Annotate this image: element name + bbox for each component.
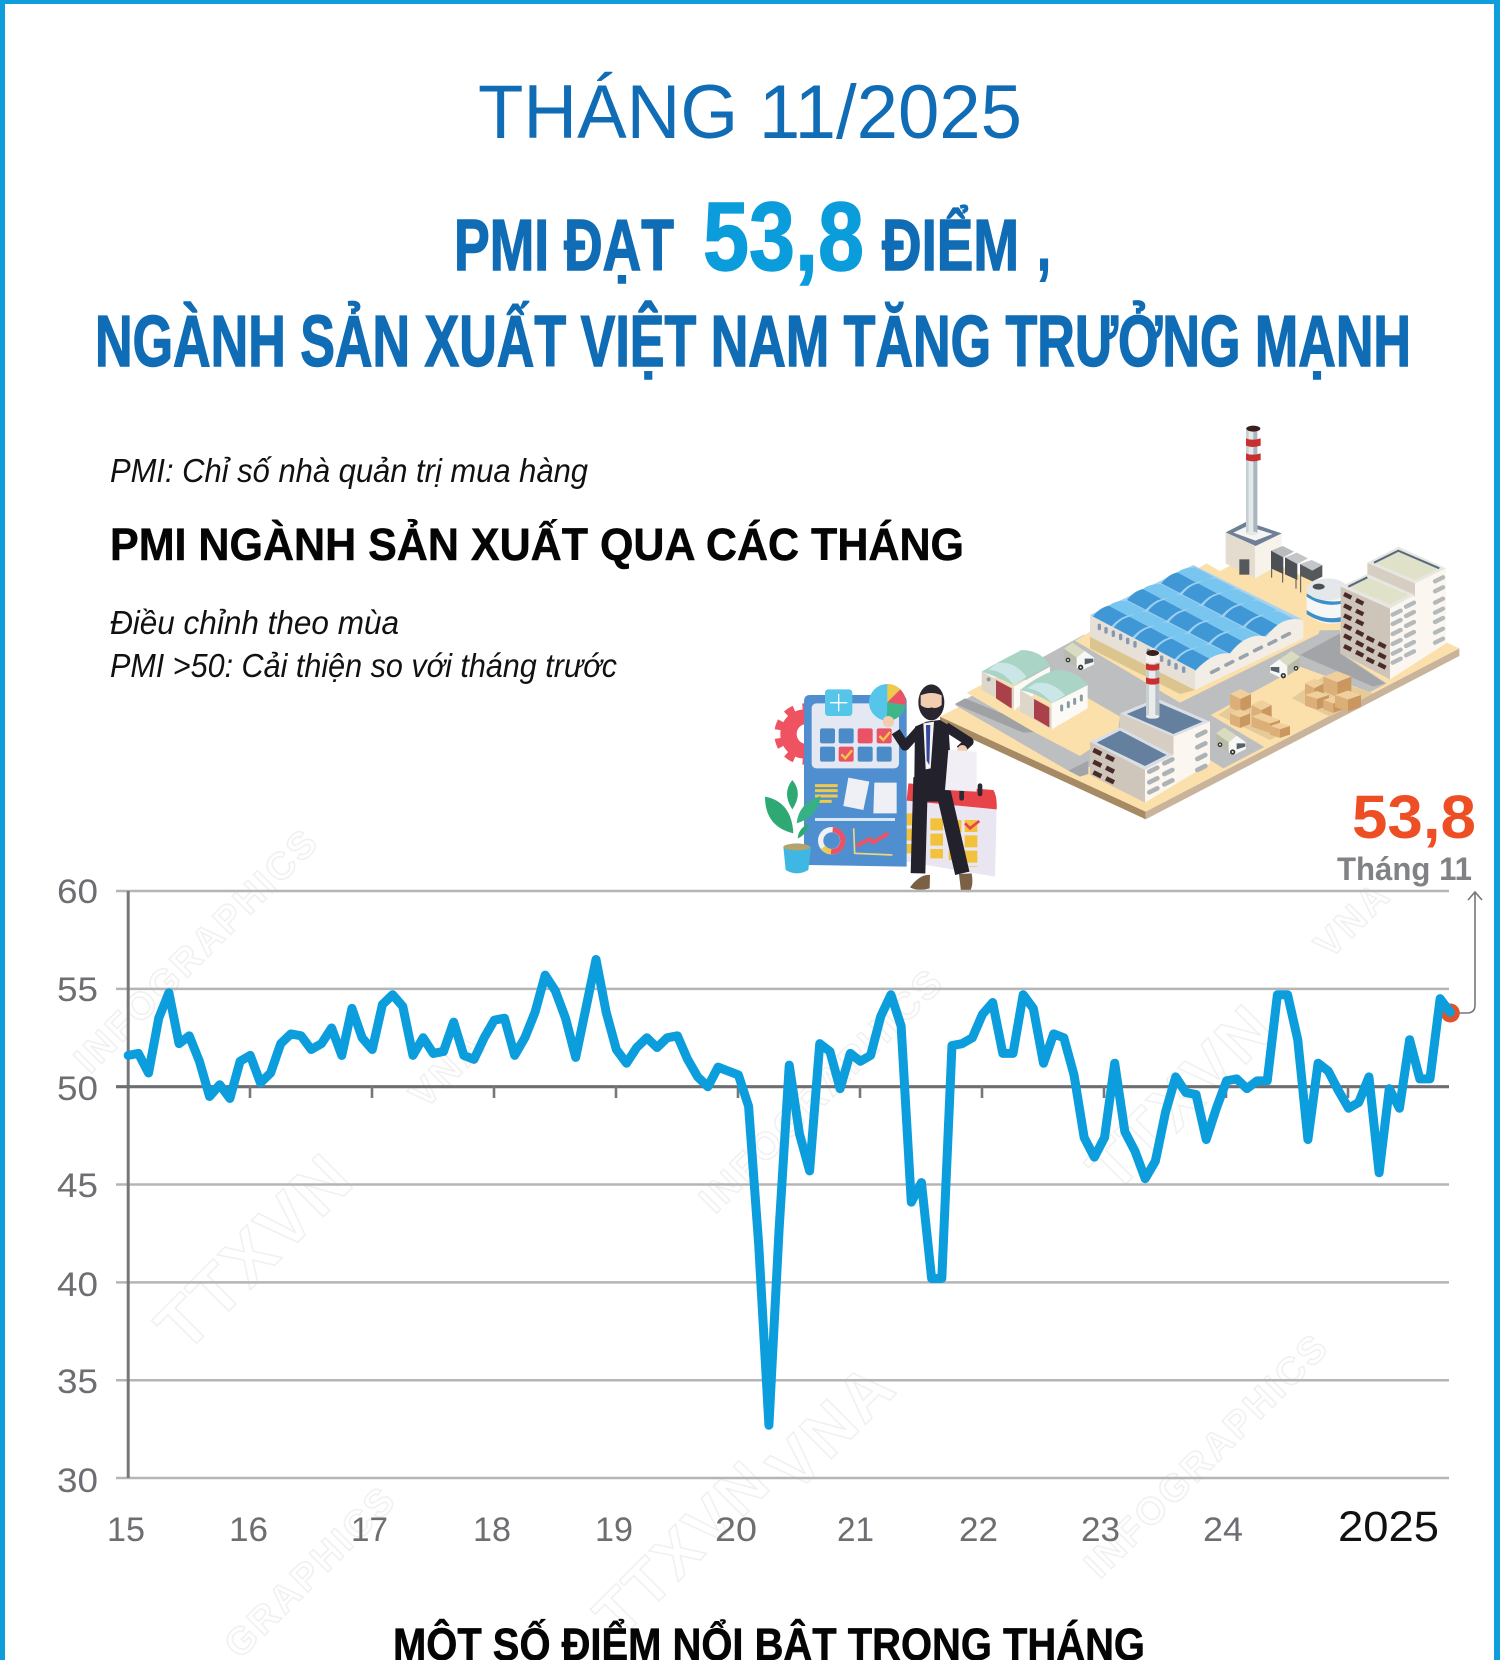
businessman	[883, 684, 977, 892]
x axis labels: 23	[1081, 1511, 1120, 1549]
y axis labels: 40	[57, 1266, 98, 1304]
watermarks: INFOGRAPHICS	[1077, 1325, 1338, 1586]
headline: value 53,8: 53,8	[703, 182, 864, 291]
note: seasonal adjustment: Điều chỉnh theo mùa	[110, 605, 399, 642]
main hall roof	[1090, 565, 1303, 672]
illustration: businessman with dashboard	[765, 684, 997, 892]
y axis labels: 35	[57, 1363, 98, 1401]
callout: latest value: 53,8	[1352, 783, 1476, 851]
watermarks: VNA	[753, 1348, 910, 1505]
truck bottom	[1216, 727, 1246, 755]
watermarks: TTXVN	[1073, 989, 1288, 1205]
y axis labels: 55	[57, 971, 98, 1009]
watermarks: INFOGRAPHICS	[692, 960, 953, 1221]
x axis labels: 16	[229, 1511, 268, 1549]
round tank	[1307, 578, 1348, 624]
watermarks: VNA	[1307, 874, 1399, 966]
gear	[778, 707, 832, 761]
front building	[1090, 698, 1210, 803]
x axis labels: 24	[1203, 1511, 1243, 1549]
PMI series line	[128, 959, 1450, 1425]
calendar	[907, 783, 997, 877]
callout: month label: Tháng 11	[1337, 851, 1472, 887]
truck top-right	[1270, 651, 1300, 678]
note: PMI threshold: PMI >50: Cải thiện so với tháng trước	[110, 648, 617, 685]
truck top-left	[1064, 643, 1094, 670]
dashboard panel	[804, 689, 907, 867]
x axis labels: 18	[473, 1511, 511, 1549]
definition note: PMI: Chỉ số nhà quản trị mua hàng	[110, 453, 588, 490]
chart grid lines	[116, 891, 1449, 1478]
headline	[95, 182, 1411, 382]
x axis labels: 17	[351, 1511, 388, 1549]
office building	[1341, 547, 1446, 679]
watermarks	[67, 820, 1399, 1660]
chart heading: PMI NGÀNH SẢN XUẤT QUA CÁC THÁNG	[110, 519, 964, 570]
latest value dot	[1441, 1004, 1460, 1022]
x axis labels: 19	[595, 1511, 633, 1549]
title: month: THÁNG 11/2025	[478, 70, 1022, 155]
small chimney	[1146, 650, 1159, 719]
headline: unit: ĐIỂM	[882, 205, 1019, 286]
x axis label: 2025: 2025	[1338, 1503, 1439, 1551]
warehouse 1	[982, 650, 1050, 711]
main hall shadow	[1090, 637, 1195, 694]
y axis labels: 60	[57, 873, 98, 911]
cooling units	[1271, 546, 1322, 592]
y axis labels: 30	[57, 1462, 98, 1500]
x axis labels	[107, 1511, 1243, 1549]
headline: comma: ,	[1037, 206, 1051, 286]
y axis labels: 45	[57, 1167, 98, 1205]
main hall walls	[1090, 615, 1303, 690]
callout connector arrow	[1459, 892, 1482, 1013]
x axis labels: 15	[107, 1511, 145, 1549]
y axis labels	[57, 873, 98, 1500]
x axis labels: 22	[959, 1511, 998, 1549]
x axis labels: 21	[837, 1511, 874, 1549]
x axis labels: 20	[715, 1511, 757, 1549]
roads	[955, 630, 1387, 777]
pie chart	[869, 684, 906, 721]
crates front	[1218, 689, 1290, 740]
main hall plot	[1075, 563, 1320, 703]
factory platform	[940, 553, 1459, 819]
warehouse 2	[1020, 670, 1088, 729]
illustration: factory	[940, 426, 1459, 819]
chart: PMI line chart	[57, 873, 1482, 1551]
warehouse plot	[967, 673, 1120, 756]
chart axes	[116, 891, 1449, 1478]
crates back	[1292, 671, 1373, 717]
chimney building	[1226, 522, 1282, 578]
watermarks: TTXVN	[140, 1138, 368, 1366]
watermarks: VNA	[402, 1024, 494, 1116]
y axis labels: 50	[57, 1070, 98, 1108]
watermarks: TTXVN	[581, 1447, 784, 1650]
crates plot	[1211, 667, 1373, 747]
plant	[765, 780, 821, 873]
headline: PMI label: PMI ĐẠT	[454, 206, 674, 286]
tall chimney	[1246, 426, 1261, 535]
watermarks: INFOGRAPHICS	[67, 820, 328, 1081]
